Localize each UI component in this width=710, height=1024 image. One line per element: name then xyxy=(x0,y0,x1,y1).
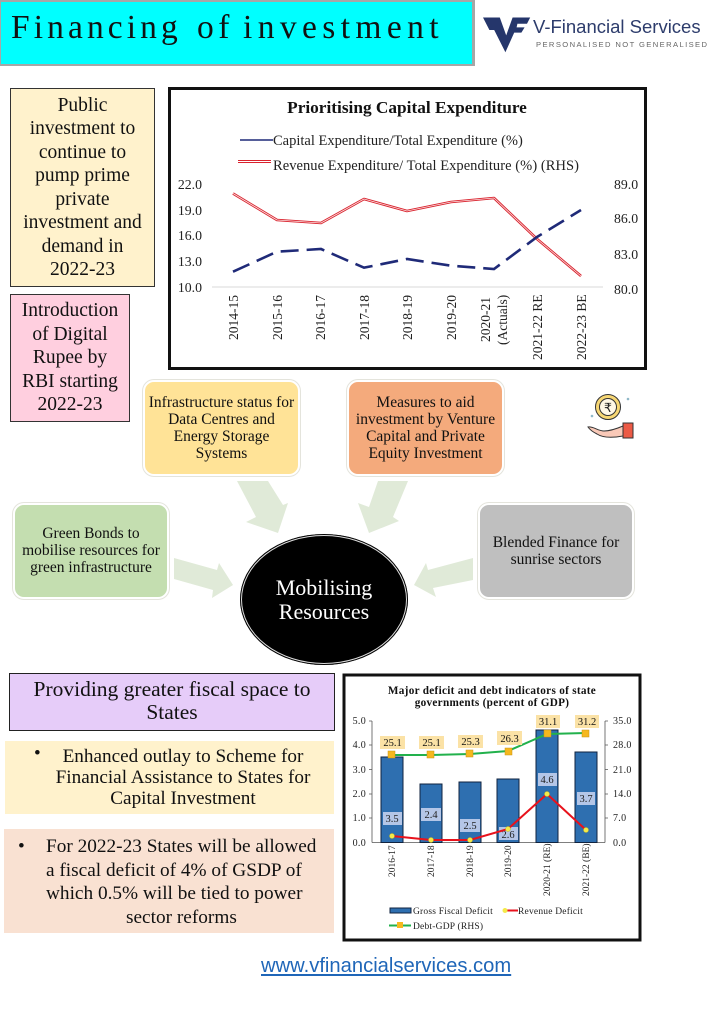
arrow: top left xyxy=(237,481,288,533)
left axis labels: 22.0 xyxy=(178,177,202,192)
box: green bonds: Green Bonds to xyxy=(42,524,140,542)
box: infrastructure status: Energy Storage xyxy=(174,428,269,445)
title banner xyxy=(0,0,475,66)
chart title: Prioritising Capital Expenditure xyxy=(287,98,527,117)
box: venture capital measures: Capital and Private xyxy=(366,428,485,445)
left axis labels: 2.0 xyxy=(353,789,366,800)
box: venture capital measures: investment by Venture xyxy=(356,411,495,428)
left axis labels: 0.0 xyxy=(353,838,366,849)
left axis labels: 5.0 xyxy=(353,716,366,727)
category labels: 2021-22 (BE) xyxy=(581,843,592,896)
category labels: (Actuals) xyxy=(495,295,510,345)
box: blended finance: sunrise sectors xyxy=(511,551,601,568)
left axis labels: 4.0 xyxy=(353,740,366,751)
legend: Revenue Deficit xyxy=(518,906,583,917)
arrow: right xyxy=(414,558,473,597)
text block: fiscal deficit: which 0.5% will be tied to power xyxy=(46,883,302,904)
chart title xyxy=(388,685,596,709)
text block: fiscal deficit: For 2022-23 States will be allowed xyxy=(46,836,316,857)
right axis labels: 21.0 xyxy=(613,765,632,776)
right axis labels: 89.0 xyxy=(614,177,638,192)
legend: Debt-GDP (RHS) xyxy=(413,921,483,932)
left axis labels: 13.0 xyxy=(178,254,202,269)
heading: fiscal space: Providing greater fiscal space to xyxy=(33,676,310,700)
bars: gross fiscal deficit xyxy=(381,730,597,842)
icon: hand holding rupee coin xyxy=(587,394,634,438)
text block: enhanced outlay: Enhanced outlay to Scheme for xyxy=(63,746,303,767)
legend xyxy=(389,906,583,932)
category labels: 2020-21 (RE) xyxy=(542,843,553,896)
arrow: top right xyxy=(358,481,408,533)
left axis labels: 10.0 xyxy=(178,280,202,295)
box: venture capital measures xyxy=(347,380,504,476)
left axis labels xyxy=(178,177,202,295)
right axis labels xyxy=(613,716,632,849)
category labels: 2016-17 xyxy=(388,845,398,877)
bar value labels: 2.6 xyxy=(501,830,515,841)
category labels: 2020-21 xyxy=(478,297,493,342)
legend: Revenue Expenditure/ Total Expenditure (%) (RHS) xyxy=(273,158,579,174)
bar value labels xyxy=(383,773,595,841)
category labels: 2015-16 xyxy=(270,295,285,340)
text block: fiscal deficit: • xyxy=(18,836,25,857)
heading: fiscal space xyxy=(9,673,335,731)
category labels: 2017-18 xyxy=(357,295,372,340)
box: infrastructure status xyxy=(143,380,300,476)
right axis labels: 83.0 xyxy=(614,247,638,262)
logo: V-Financial Services: V-Financial Services xyxy=(533,16,701,37)
revenue deficit line xyxy=(390,792,588,842)
icon: hand holding rupee coin: ₹ xyxy=(604,400,612,415)
axes xyxy=(369,721,608,842)
left axis labels: 3.0 xyxy=(353,765,366,776)
category labels: 2019-20 xyxy=(444,295,459,340)
right axis labels xyxy=(614,177,638,297)
centre circle: mobilising resources: Mobilising xyxy=(276,575,372,600)
title banner: Financing xyxy=(11,9,182,46)
legend: Gross Fiscal Deficit xyxy=(413,906,493,917)
panel: deficit and debt chart xyxy=(342,674,642,942)
category labels: 2018-19 xyxy=(400,295,415,340)
arrows into centre xyxy=(174,481,473,598)
title banner: of xyxy=(197,9,234,46)
box: venture capital measures: Measures to aid xyxy=(376,394,475,411)
category labels: 2016-17 xyxy=(313,295,328,340)
text block: enhanced outlay: Financial Assistance to States for xyxy=(56,767,310,788)
box: infrastructure status: Data Centres and xyxy=(168,411,275,428)
debt-GDP value labels: 25.1 xyxy=(383,738,402,749)
chart title: Major deficit and debt indicators of state xyxy=(388,685,596,697)
box: blended finance: Blended Finance for xyxy=(493,534,619,551)
text block: fiscal deficit: a fiscal deficit of 4% of GSDP of xyxy=(46,860,302,880)
box: infrastructure status: Infrastructure status for xyxy=(149,394,294,411)
right axis labels: 28.0 xyxy=(613,740,632,751)
box: green bonds: mobilise resources for xyxy=(22,542,160,558)
right axis labels: 80.0 xyxy=(614,282,638,297)
category labels: 2021-22 RE xyxy=(530,294,545,360)
left axis labels: 19.0 xyxy=(178,203,202,218)
right axis labels: 86.0 xyxy=(614,211,638,226)
legend xyxy=(238,133,579,174)
debt-GDP value labels: 25.1 xyxy=(422,738,441,749)
panel: prioritising capital expenditure chart xyxy=(168,87,647,370)
category labels xyxy=(226,294,589,360)
arrow: left xyxy=(174,558,233,598)
centre circle: mobilising resources xyxy=(240,534,408,665)
right axis labels: 14.0 xyxy=(613,789,632,800)
debt-GDP value labels: 25.3 xyxy=(461,737,480,748)
box: infrastructure status: Systems xyxy=(196,445,247,462)
right axis labels: 0.0 xyxy=(613,838,626,849)
text block: fiscal deficit: sector reforms xyxy=(126,906,237,928)
debt-GDP value labels xyxy=(380,715,599,749)
right axis labels: 7.0 xyxy=(613,813,626,824)
box: green bonds: green infrastructure xyxy=(30,558,152,576)
chart title: governments (percent of GDP) xyxy=(415,697,569,709)
category labels: 2018-19 xyxy=(466,845,476,877)
logo: V-Financial Services xyxy=(483,16,708,52)
box: green bonds xyxy=(13,503,169,599)
website link: www.vfinancialservices.com xyxy=(261,955,511,977)
text block: fiscal deficit xyxy=(4,829,334,933)
debt-GDP value labels: 31.2 xyxy=(578,717,596,728)
text block: enhanced outlay: • xyxy=(34,743,41,764)
debt-GDP value labels: 31.1 xyxy=(539,717,557,728)
centre circle: mobilising resources: Resources xyxy=(279,598,369,624)
left axis labels: 1.0 xyxy=(353,813,366,824)
text block: enhanced outlay: Capital Investment xyxy=(110,788,256,809)
left axis labels xyxy=(353,716,366,849)
title banner: investment xyxy=(243,9,444,46)
category labels xyxy=(388,843,592,896)
bar value labels: 2.4 xyxy=(424,810,438,821)
text block: enhanced outlay xyxy=(5,741,334,814)
capital expenditure line xyxy=(233,210,581,272)
debt-GDP value labels: 26.3 xyxy=(500,734,519,745)
category labels: 2014-15 xyxy=(226,295,241,340)
right axis labels: 35.0 xyxy=(613,716,632,727)
left axis labels: 16.0 xyxy=(178,228,202,243)
logo: V-Financial Services: PERSONALISED NOT GENERALISED xyxy=(536,40,708,49)
bar value labels: 4.6 xyxy=(540,775,554,786)
revenue expenditure line xyxy=(233,194,581,276)
bar value labels: 2.5 xyxy=(463,821,477,832)
bar value labels: 3.5 xyxy=(385,814,399,825)
text box: digital rupee: Introduction of Digital Rupee by RBI starting 2022-23 xyxy=(22,300,118,415)
box: venture capital measures: Equity Investment xyxy=(368,445,483,462)
category labels: 2022-23 BE xyxy=(574,294,589,360)
category labels: 2019-20 xyxy=(504,845,514,877)
text box: public investment: Public investment to continue to pump prime private investment and demand in 2022-23 xyxy=(23,94,142,280)
legend: Capital Expenditure/Total Expenditure (%) xyxy=(273,133,523,149)
debt-GDP line xyxy=(388,730,589,758)
box: blended finance xyxy=(478,503,634,599)
heading: fiscal space: States xyxy=(146,700,198,724)
category labels: 2017-18 xyxy=(427,845,437,877)
bar value labels: 3.7 xyxy=(579,794,593,805)
